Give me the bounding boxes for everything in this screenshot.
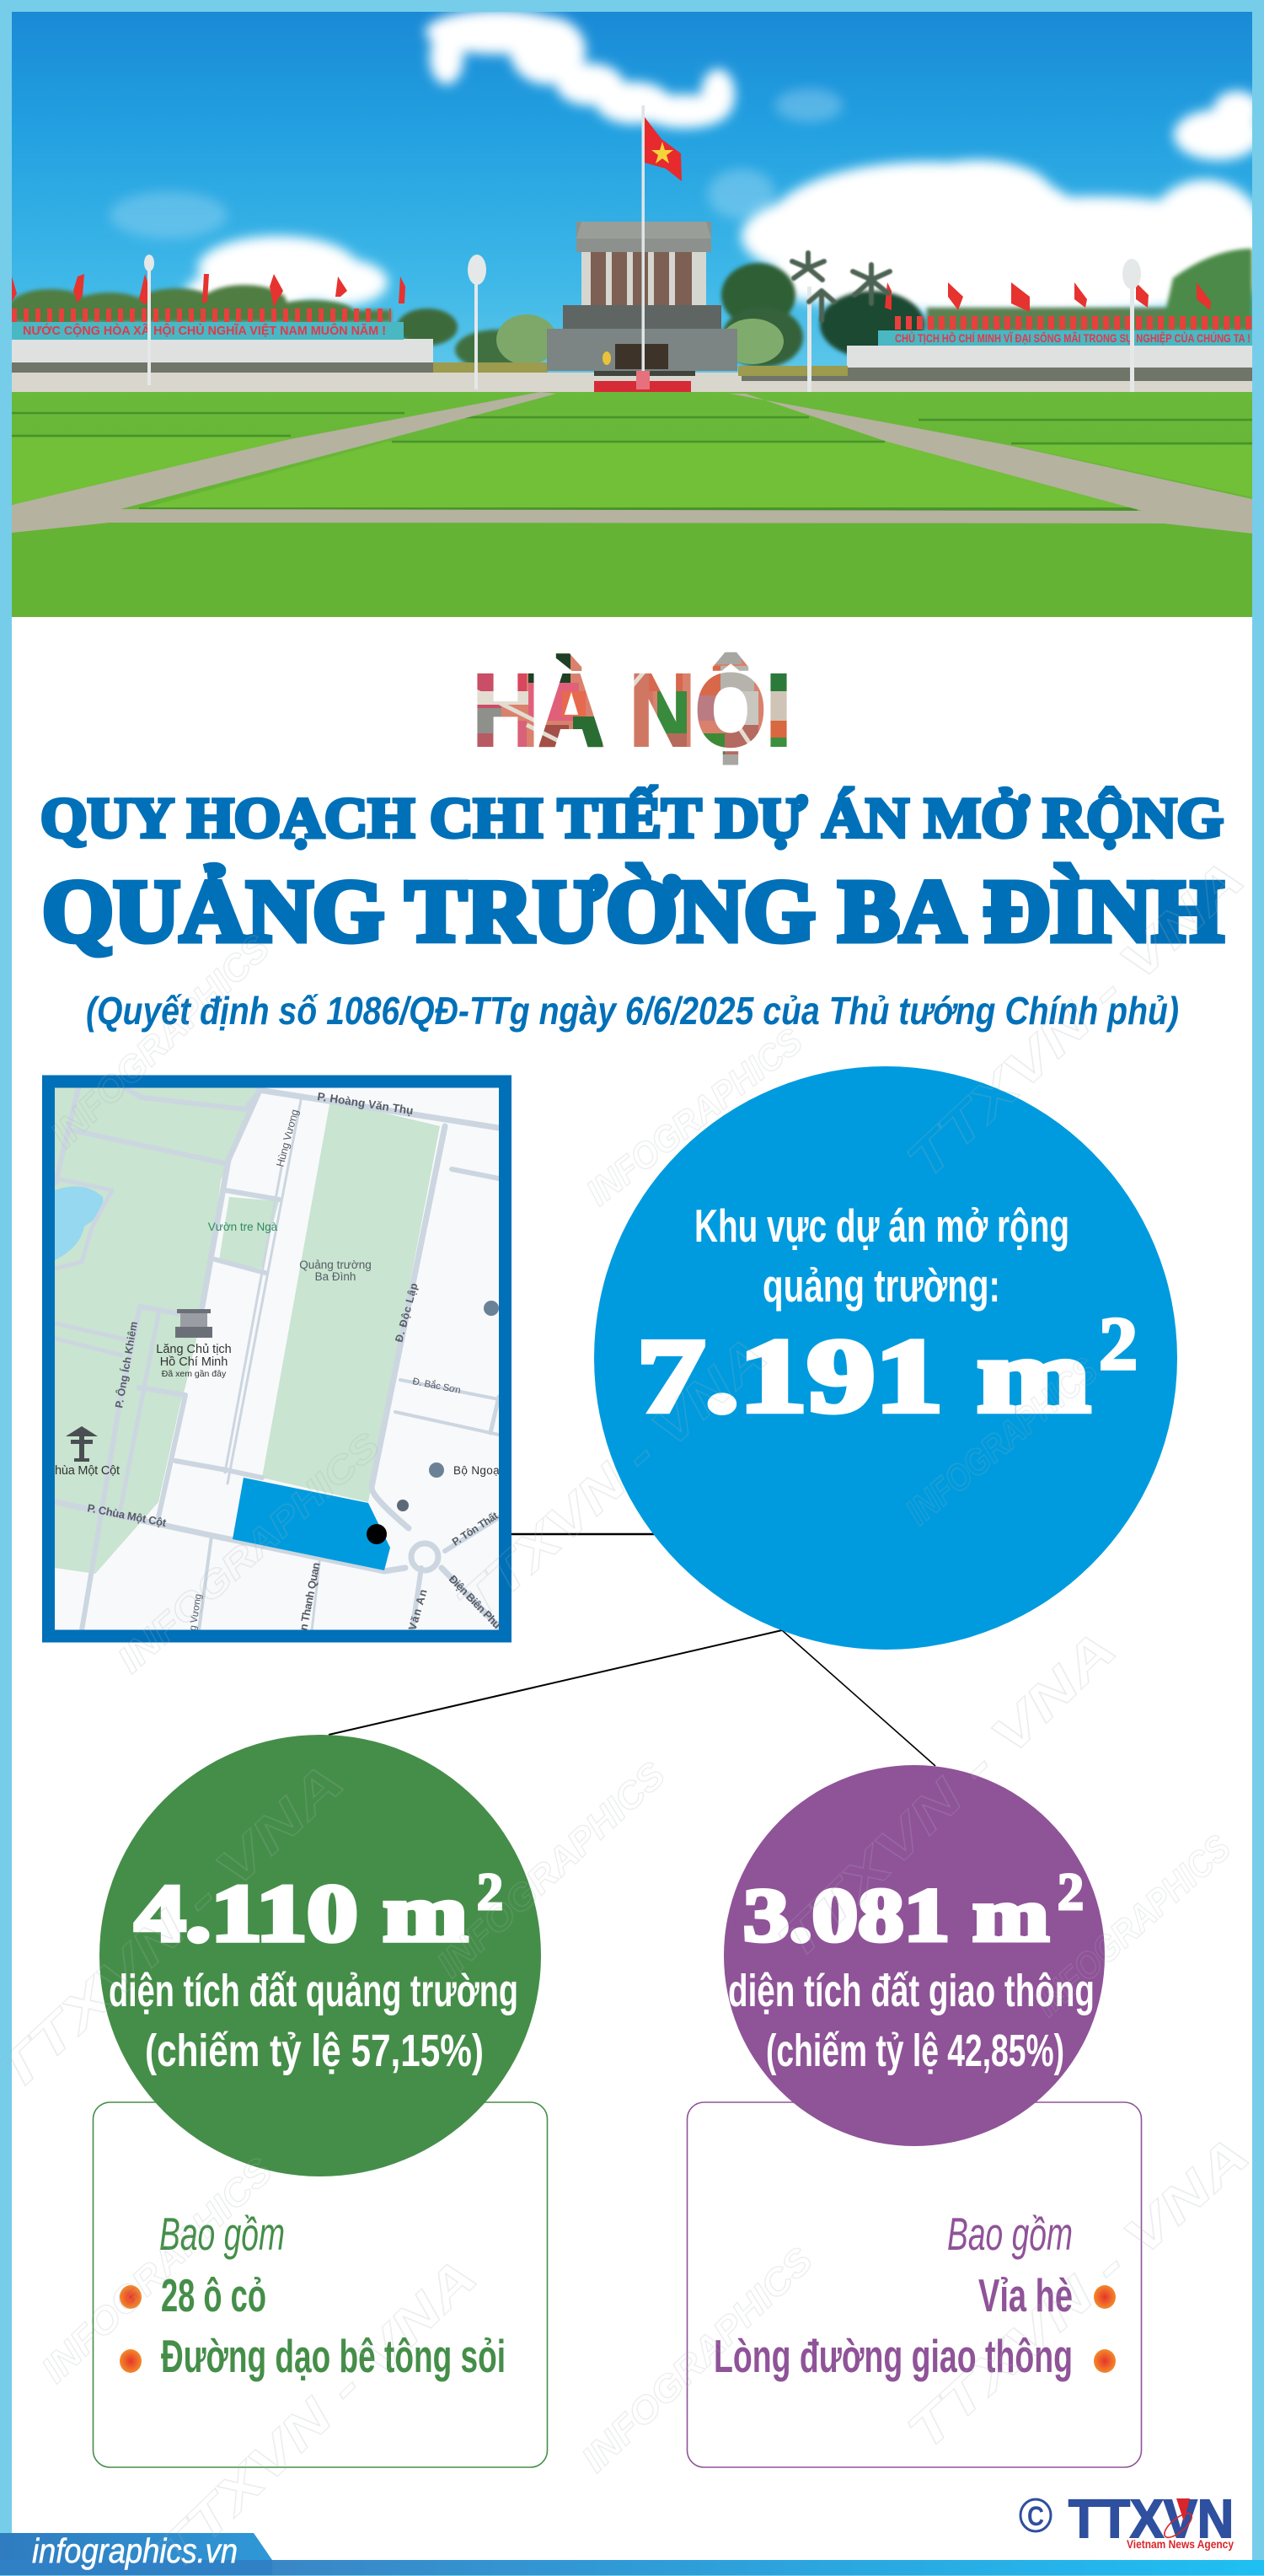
text: traffic land share: (chiếm tỷ lệ 42,85%) — [766, 2026, 1064, 2076]
heading: Hà Nội: HÀ NỘI — [473, 652, 791, 767]
right wall — [847, 346, 1252, 368]
map: labels: Điện Biên Phủ — [447, 1573, 504, 1631]
heading: Quảng trường Ba Đình: QUẢNG TRƯỜNG BA ĐÌNH — [42, 861, 1224, 960]
map: place pins — [397, 1301, 499, 1511]
map: labels: Ba Đình — [315, 1270, 356, 1283]
text: item sidewalk: Vỉa hè — [978, 2269, 1073, 2321]
map: labels: g Vương — [188, 1593, 204, 1631]
value: 7.191 m2: 2 — [1099, 1302, 1138, 1386]
map frame — [49, 1081, 506, 1636]
map: labels: Văn An — [405, 1588, 430, 1632]
flower bed — [594, 371, 691, 392]
watermarks: INFOGRAPHICS — [34, 2150, 281, 2391]
watermarks: INFOGRAPHICS — [110, 1425, 388, 1681]
text: traffic land label: diện tích đất giao thông — [728, 1966, 1095, 2016]
map: labels: Hồ Chí Minh — [160, 1355, 228, 1369]
map: mausoleum icon — [175, 1309, 212, 1338]
value: 4.110 m2: 4.110 m — [135, 1868, 468, 1958]
watermarks: TTXVN - VNA — [766, 1620, 1127, 1971]
map: labels — [55, 1090, 504, 1632]
round trees — [496, 314, 784, 365]
paving paths — [12, 392, 1252, 534]
logo: TTXVN: C — [1027, 2501, 1044, 2531]
panel: square land circle — [99, 1735, 541, 2176]
map: green areas — [55, 1087, 440, 1574]
connector: map to project area circle — [377, 1533, 666, 1535]
map: labels: Bộ Ngoại — [453, 1464, 502, 1477]
map: labels: Đ. Bắc Sơn — [411, 1376, 462, 1396]
list: traffic land items — [714, 2208, 1116, 2382]
map: roads — [56, 1088, 499, 1631]
watermarks: INFOGRAPHICS — [43, 927, 278, 1156]
panel: square land box — [93, 2102, 548, 2467]
text: project area label line 2: quảng trường: — [763, 1259, 1000, 1312]
bullet — [1094, 2349, 1116, 2373]
left wall — [12, 339, 433, 363]
clouds — [110, 10, 1264, 314]
mausoleum — [547, 222, 737, 376]
map: labels: P. Hoàng Văn Thụ — [317, 1090, 415, 1117]
map: labels: Đã xem gần đây — [162, 1369, 227, 1379]
map marker dot — [367, 1524, 387, 1544]
watermarks — [0, 850, 1260, 2576]
main flag and pole — [642, 105, 682, 379]
value: 4.110 m2 — [135, 1864, 503, 1958]
background trees — [8, 249, 1252, 370]
map: labels: Quảng trường — [299, 1258, 372, 1271]
map: lake — [55, 1187, 103, 1260]
list: square land items — [120, 2208, 506, 2382]
text: square land share: (chiếm tỷ lệ 57,15%) — [145, 2026, 484, 2076]
map: labels: Lăng Chủ tịch — [156, 1343, 232, 1356]
lawn — [12, 392, 1252, 534]
heading: Quy hoạch chi tiết dự án mở rộng: QUY HOẠCH CHI TIẾT DỰ ÁN MỞ RỘNG — [40, 786, 1224, 850]
map: labels: P. Chùa Một Cột — [86, 1501, 168, 1529]
text: item concrete paths: Đường dạo bê tông sỏi — [161, 2330, 506, 2382]
foreground lawn edge — [88, 523, 1252, 534]
value: 3.081 m2: 2 — [1058, 1864, 1084, 1921]
text: item 28 grass plots: 28 ô cỏ — [161, 2269, 266, 2321]
bullet — [1094, 2285, 1116, 2309]
watermarks: INFOGRAPHICS — [574, 2240, 821, 2480]
side flags — [12, 274, 1211, 312]
connector: to purple circle — [782, 1630, 935, 1766]
white content panel — [12, 617, 1252, 2560]
text: includes: Bao gồm — [947, 2208, 1073, 2260]
footer bar — [272, 2560, 1264, 2575]
left banner: NƯỚC CỘNG HÒA XÃ HỘI CHỦ NGHĨA VIỆT NAM MUÔN NĂM ! — [23, 323, 386, 338]
watermarks: TTXVN - VNA — [446, 1326, 778, 1634]
map: labels: n Thanh Quan — [297, 1561, 323, 1632]
map: project area — [233, 1478, 390, 1570]
logo: TTXVN: Vietnam News Agency — [1127, 2537, 1234, 2551]
text: project area label: Khu vực dự án mở rộng — [694, 1199, 1069, 1252]
value: 3.081 m2: 3.081 m — [743, 1874, 1049, 1957]
value: 4.110 m2: 2 — [477, 1864, 503, 1921]
bullet — [120, 2349, 142, 2373]
logo: TTXVN: TTXVN — [1069, 2488, 1234, 2549]
plaza road — [12, 373, 1252, 392]
footer tab: infographics.vn: infographics.vn — [32, 2531, 238, 2570]
map: pagoda icon — [66, 1426, 98, 1462]
bullet — [120, 2285, 142, 2309]
map: labels: hùa Một Cột — [55, 1464, 120, 1478]
watermarks: INFOGRAPHICS — [1026, 1827, 1239, 2024]
panel: traffic land box — [688, 2102, 1141, 2467]
watermarks: TTXVN - VNA — [896, 850, 1255, 1190]
lawn shading — [12, 413, 1252, 509]
map: labels: Đ. Độc Lập — [393, 1281, 420, 1344]
value: 7.191 m2 — [637, 1302, 1138, 1435]
panel: traffic land circle — [724, 1765, 1105, 2146]
map: labels: Hùng Vương — [274, 1108, 301, 1168]
watermarks: INFOGRAPHICS — [579, 1020, 810, 1214]
watermarks: TTXVN - VNA — [897, 2126, 1260, 2461]
watermarks: TTXVN - VNA — [145, 2248, 488, 2576]
text: item roadway: Lòng đường giao thông — [714, 2330, 1073, 2382]
hero photo: Ba Dinh Square and Ho Chi Minh Mausoleum — [8, 10, 1264, 620]
panel: location map — [49, 1081, 506, 1636]
value: 7.191 m2: 7.191 m — [637, 1318, 1090, 1435]
map: labels: P. Ông Ích Khiêm — [112, 1320, 140, 1409]
panel: project area circle — [594, 1066, 1177, 1650]
connector: to green circle — [329, 1630, 782, 1735]
watermarks: INFOGRAPHICS — [898, 1350, 1106, 1533]
small flag rows — [12, 309, 391, 322]
text: includes: Bao gồm — [159, 2208, 285, 2260]
watermarks: INFOGRAPHICS — [429, 1754, 673, 1985]
lamp posts — [144, 255, 1141, 392]
value: 3.081 m2 — [743, 1864, 1084, 1957]
palm trees — [792, 253, 890, 320]
map: labels: Vườn tre Ngà — [208, 1221, 278, 1233]
text: square land label: diện tích đất quảng trường — [109, 1966, 518, 2016]
map: labels: P. Tôn Thất — [450, 1510, 501, 1548]
lawn lighter plots — [12, 437, 1252, 509]
